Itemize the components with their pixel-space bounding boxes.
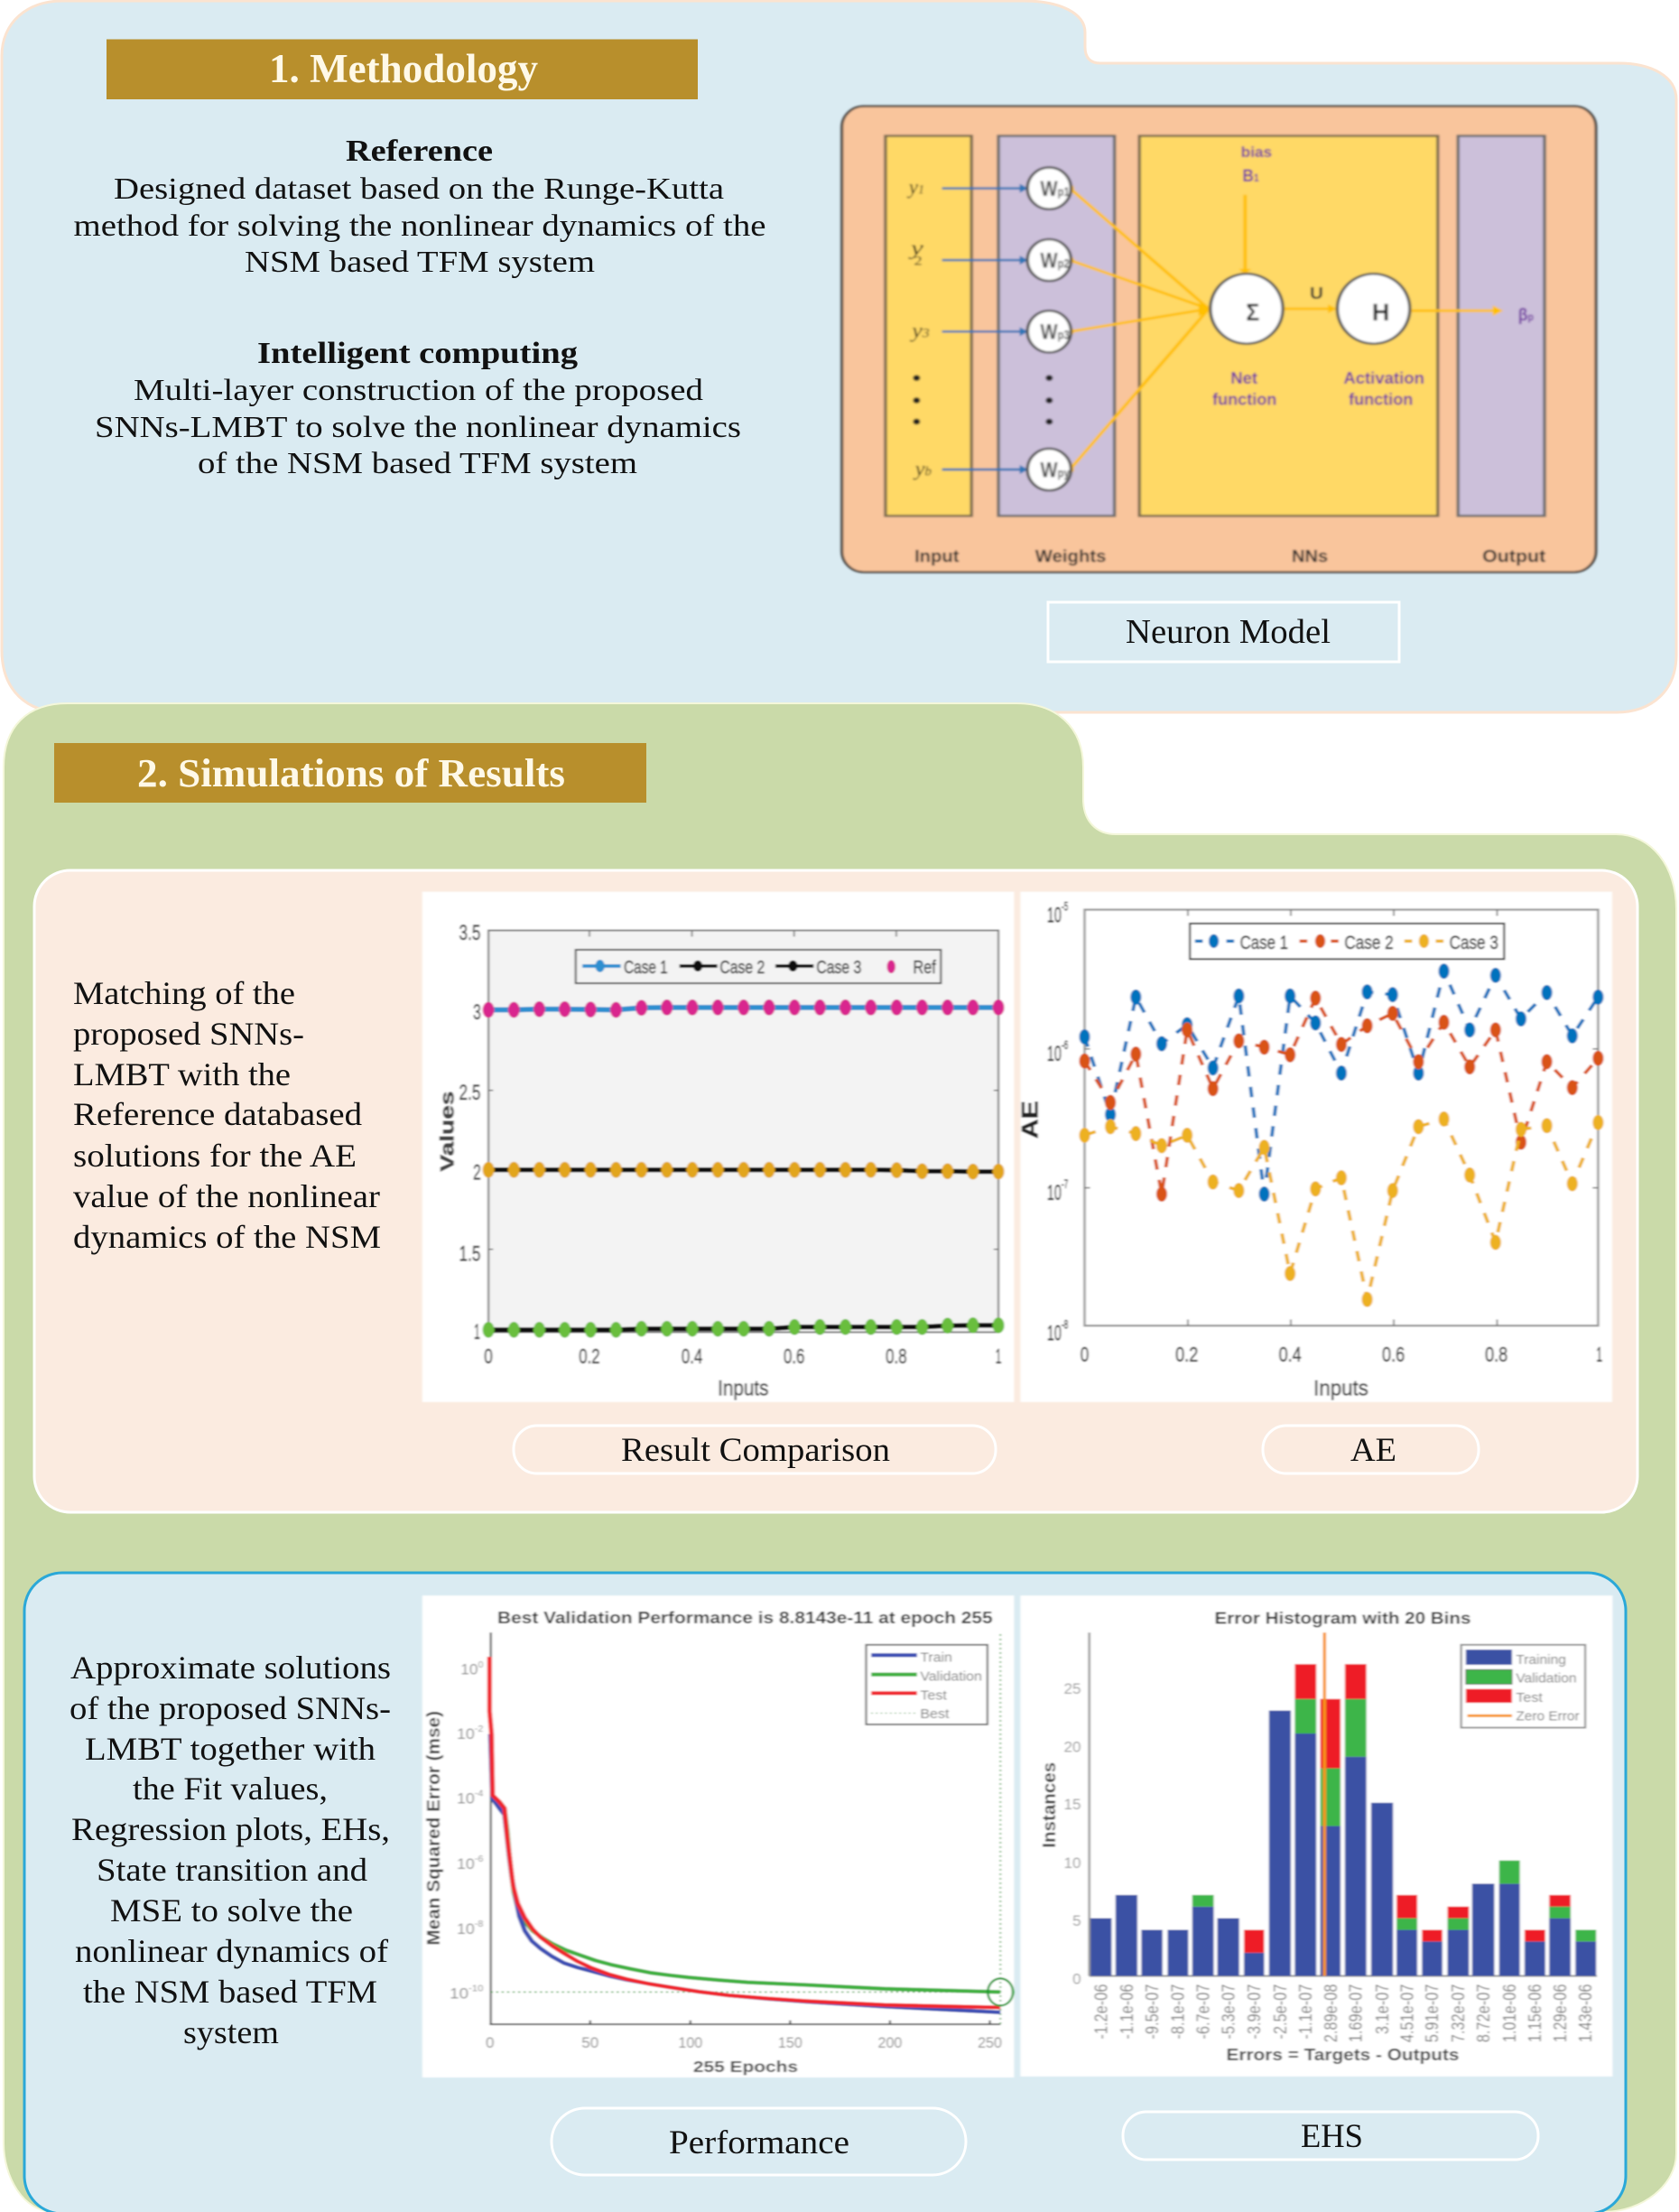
chart: absolute error log plot: 10 <box>1047 904 1074 927</box>
diagram: neuron model: NNs <box>1292 546 1328 566</box>
chart: error histogram: -5.3e-07 <box>1218 1984 1238 2040</box>
chart: result comparison line chart: 2.5 <box>459 1081 480 1105</box>
diagram: neuron model: H <box>1372 299 1389 326</box>
chart: absolute error log plot: 0.4 <box>1279 1343 1302 1367</box>
legend: performance <box>867 1645 988 1724</box>
caption: neuron model <box>1048 602 1399 662</box>
chart: error histogram: 1.29e-06 <box>1549 1984 1570 2042</box>
heading: 2. Simulations of Results: 2. Simulations of Results <box>137 751 565 795</box>
chart: result comparison line chart: 0.2 <box>579 1345 600 1369</box>
chart: absolute error log plot: -6 <box>1062 1039 1068 1053</box>
chart: result comparison line chart: 0.8 <box>886 1345 907 1369</box>
chart: absolute error log plot: 0.2 <box>1175 1343 1198 1367</box>
chart: result comparison line chart: 0.4 <box>682 1345 702 1369</box>
text block: matching description <box>73 975 381 1255</box>
chart: result comparison line chart: 1 <box>996 1345 1002 1369</box>
chart: error histogram: 2.89e-08 <box>1320 1984 1340 2042</box>
legend: result comparison: Ref <box>914 957 936 978</box>
diagram: neuron model: y <box>908 237 923 260</box>
chart: best validation performance: -4 <box>475 1789 483 1798</box>
caption: neuron model: Neuron Model <box>1126 613 1331 651</box>
chart: absolute error log plot <box>1018 892 1612 1402</box>
chart: best validation performance: 10 <box>460 1660 480 1678</box>
chart: error histogram: 5.91e-07 <box>1421 1984 1442 2042</box>
chart: result comparison line chart <box>422 892 1014 1402</box>
chart: error histogram: -3.9e-07 <box>1244 1984 1265 2040</box>
chart: best validation performance: 150 <box>778 2034 802 2050</box>
chart: absolute error log plot: 10 <box>1047 1043 1074 1066</box>
chart: best validation performance: -8 <box>475 1919 483 1929</box>
heading: 1. Methodology: 1. Methodology <box>269 46 538 91</box>
chart: best validation performance: 10 <box>457 1725 477 1743</box>
panel: performance and error histogram <box>24 1573 1626 2212</box>
legend: error histogram: Test <box>1516 1689 1543 1705</box>
chart: error histogram: 8.72e-07 <box>1472 1984 1493 2042</box>
caption: EHS <box>1123 2112 1538 2160</box>
legend: error histogram: Training <box>1516 1651 1566 1667</box>
chart: absolute error log plot: Inputs <box>1313 1375 1368 1400</box>
text block: reference: method for solving the nonlinear dynamics of the <box>74 209 765 243</box>
chart: absolute error log plot: 10 <box>1047 1322 1074 1345</box>
text block: reference <box>74 135 765 279</box>
text block: approximate solutions description: LMBT together with <box>85 1731 376 1767</box>
chart: error histogram: -6.7e-07 <box>1192 1984 1213 2040</box>
chart: error histogram: -1.2e-06 <box>1090 1984 1111 2040</box>
diagram: neuron model: Wp2 <box>1041 249 1070 273</box>
text block: intelligent computing: Intelligent computing <box>257 337 578 370</box>
text block: intelligent computing: SNNs-LMBT to solve the nonlinear dynamics <box>95 411 741 444</box>
legend: result comparison: Case 3 <box>816 957 861 978</box>
legend: result comparison <box>576 950 941 983</box>
chart: result comparison line chart: 0 <box>484 1345 493 1369</box>
caption: AE: AE <box>1350 1432 1396 1469</box>
chart: best validation performance: -10 <box>468 1984 483 1994</box>
text block: approximate solutions description: nonlinear dynamics of <box>75 1933 388 1969</box>
diagram: neuron model: Σ <box>1246 299 1259 326</box>
chart: error histogram <box>1020 1595 1612 2077</box>
chart: best validation performance: 255 Epochs <box>693 2059 798 2076</box>
diagram: neuron model: Wp1 <box>1041 177 1070 201</box>
chart: absolute error log plot: AE <box>1018 1101 1044 1139</box>
legend: performance: Best <box>920 1705 950 1721</box>
chart: best validation performance: -2 <box>475 1724 483 1734</box>
panel: methodology <box>2 1 1676 712</box>
text block: approximate solutions description: of the proposed SNNs- <box>70 1690 391 1726</box>
caption: result comparison <box>514 1426 996 1473</box>
caption: performance: Performance <box>669 2124 849 2161</box>
chart: absolute error log plot: -8 <box>1062 1318 1068 1332</box>
legend: result comparison: Case 1 <box>624 957 668 978</box>
chart: absolute error log plot: 0.8 <box>1485 1343 1507 1367</box>
chart: error histogram: Error Histogram with 20 Bins <box>1214 1609 1470 1628</box>
legend: AE <box>1190 924 1504 959</box>
text block: matching description: dynamics of the NSM <box>73 1219 381 1255</box>
chart: error histogram: 1.43e-06 <box>1574 1984 1595 2042</box>
diagram: neuron model: bias <box>1241 144 1272 161</box>
caption: performance <box>552 2108 966 2175</box>
diagram: neuron model: Weights <box>1035 546 1106 566</box>
chart: error histogram: 5 <box>1072 1912 1081 1929</box>
legend: AE: Case 2 <box>1344 931 1394 953</box>
chart: best validation performance <box>422 1595 1014 2077</box>
diagram: neuron model: Output <box>1482 546 1545 566</box>
legend: error histogram <box>1461 1645 1585 1728</box>
diagram: neuron model: function <box>1212 390 1276 409</box>
chart: best validation performance: Best Validation Performance is 8.8143e-11 at epoch 255 <box>497 1609 993 1627</box>
chart: result comparison line chart: Values <box>436 1091 459 1172</box>
chart: absolute error log plot: 0.6 <box>1382 1343 1405 1367</box>
legend: performance: Validation <box>920 1668 982 1684</box>
text block: reference: NSM based TFM system <box>245 246 595 279</box>
legend: result comparison: Case 2 <box>719 957 765 978</box>
diagram: neuron model <box>842 107 1596 572</box>
text block: approximate solutions description: Approximate solutions <box>70 1650 391 1686</box>
text block: approximate solutions description <box>70 1650 391 2050</box>
chart: error histogram: 15 <box>1064 1796 1081 1812</box>
chart: best validation performance: 10 <box>450 1984 469 2002</box>
caption: result comparison: Result Comparison <box>621 1432 890 1469</box>
chart: error histogram: 1.01e-06 <box>1498 1984 1519 2042</box>
text block: reference: Designed dataset based on the Runge-Kutta <box>114 172 724 206</box>
text block: approximate solutions description: the Fit values, <box>133 1771 328 1807</box>
chart: best validation performance: 200 <box>878 2034 902 2050</box>
text block: matching description: Matching of the <box>73 975 295 1011</box>
text block: matching description: solutions for the AE <box>73 1138 357 1174</box>
chart: best validation performance: 10 <box>457 1920 477 1938</box>
chart: error histogram: 25 <box>1064 1680 1081 1697</box>
chart: error histogram: -9.5e-07 <box>1141 1984 1162 2040</box>
chart: result comparison line chart: 3 <box>473 1001 481 1025</box>
chart: error histogram: -8.1e-07 <box>1167 1984 1188 2040</box>
chart: error histogram: 1.69e-07 <box>1345 1984 1366 2042</box>
chart: absolute error log plot: -7 <box>1062 1178 1068 1192</box>
chart: result comparison line chart: 2 <box>473 1161 481 1185</box>
legend: AE: Case 1 <box>1240 931 1288 953</box>
chart: best validation performance: 250 <box>978 2034 1002 2050</box>
chart: best validation performance: 0 <box>486 2034 495 2050</box>
diagram: neuron model: Wpy <box>1041 459 1070 482</box>
panel: simulations of results <box>4 703 1676 2212</box>
chart: error histogram: Instances <box>1038 1762 1059 1848</box>
text block: approximate solutions description: the NSM based TFM <box>83 1974 377 2010</box>
text block: matching description: LMBT with the <box>73 1056 291 1092</box>
diagram: neuron model: βp <box>1518 305 1534 324</box>
chart: best validation performance: 10 <box>457 1789 477 1807</box>
chart: absolute error log plot: 1 <box>1596 1343 1602 1367</box>
chart: best validation performance: Mean Squared Error (mse) <box>422 1711 443 1946</box>
caption: AE <box>1263 1426 1479 1473</box>
text block: matching description: value of the nonlinear <box>73 1178 380 1214</box>
diagram: neuron model: y3 <box>909 320 930 342</box>
diagram: neuron model: function <box>1349 390 1413 409</box>
chart: absolute error log plot: -5 <box>1062 900 1068 914</box>
legend: error histogram: Validation <box>1516 1670 1577 1686</box>
chart: error histogram: Errors = Targets - Outputs <box>1226 2046 1459 2065</box>
chart: result comparison line chart: 1 <box>474 1321 480 1344</box>
chart: best validation performance: 10 <box>457 1855 477 1873</box>
chart: error histogram: 3.1e-07 <box>1371 1984 1392 2034</box>
text block: intelligent computing: of the NSM based TFM system <box>198 447 637 480</box>
chart: best validation performance: -6 <box>475 1854 483 1864</box>
chart: error histogram: -2.5e-07 <box>1269 1984 1290 2040</box>
chart: error histogram: -1.1e-07 <box>1294 1984 1315 2040</box>
chart: result comparison line chart: Inputs <box>718 1375 769 1400</box>
chart: best validation performance: 50 <box>581 2034 598 2050</box>
diagram: neuron model: y1 <box>906 175 924 199</box>
chart: error histogram: 10 <box>1064 1854 1081 1871</box>
legend: AE: Case 3 <box>1450 931 1498 953</box>
legend: error histogram: Zero Error <box>1516 1708 1580 1724</box>
diagram: neuron model: Wp3 <box>1041 321 1070 345</box>
legend: performance: Train <box>920 1650 952 1665</box>
chart: best validation performance: 0 <box>478 1660 483 1669</box>
chart: error histogram: 20 <box>1064 1738 1081 1755</box>
heading: 2. Simulations of Results <box>54 743 646 803</box>
legend: performance: Test <box>920 1687 947 1703</box>
chart: error histogram: 7.32e-07 <box>1448 1984 1468 2042</box>
text block: approximate solutions description: system <box>183 2014 279 2050</box>
chart: error histogram: -1.1e-06 <box>1116 1984 1136 2040</box>
chart: absolute error log plot: 10 <box>1047 1181 1074 1205</box>
diagram: neuron model: Activation <box>1343 368 1424 387</box>
text block: intelligent computing <box>95 337 741 480</box>
diagram: neuron model: B1 <box>1242 165 1259 185</box>
text block: reference: Reference <box>346 135 493 168</box>
diagram: neuron model: 2 <box>914 254 923 268</box>
text block: intelligent computing: Multi-layer construction of the proposed <box>134 374 703 407</box>
chart: best validation performance: 100 <box>678 2034 702 2050</box>
text block: approximate solutions description: Regression plots, EHs, <box>71 1811 390 1847</box>
chart: error histogram: 0 <box>1072 1970 1081 1987</box>
heading: 1. Methodology <box>107 40 698 99</box>
diagram: neuron model: U <box>1310 283 1323 302</box>
text block: matching description: Reference databased <box>73 1096 362 1132</box>
panel: result comparison and AE <box>34 870 1637 1512</box>
text block: matching description: proposed SNNs- <box>73 1016 304 1052</box>
diagram: neuron model: yb <box>913 457 932 480</box>
chart: result comparison line chart: 1.5 <box>459 1242 480 1266</box>
chart: result comparison line chart: 0.6 <box>784 1345 804 1369</box>
chart: result comparison line chart: 3.5 <box>459 922 480 945</box>
caption: EHS: EHS <box>1301 2118 1363 2155</box>
diagram: neuron model: Net <box>1230 368 1258 387</box>
text block: approximate solutions description: State transition and <box>97 1852 367 1888</box>
chart: absolute error log plot: 0 <box>1081 1343 1089 1367</box>
text block: approximate solutions description: MSE to solve the <box>110 1892 353 1929</box>
chart: error histogram: 1.15e-06 <box>1525 1984 1544 2042</box>
diagram: neuron model: Input <box>914 546 960 566</box>
chart: error histogram: 4.51e-07 <box>1396 1984 1417 2042</box>
